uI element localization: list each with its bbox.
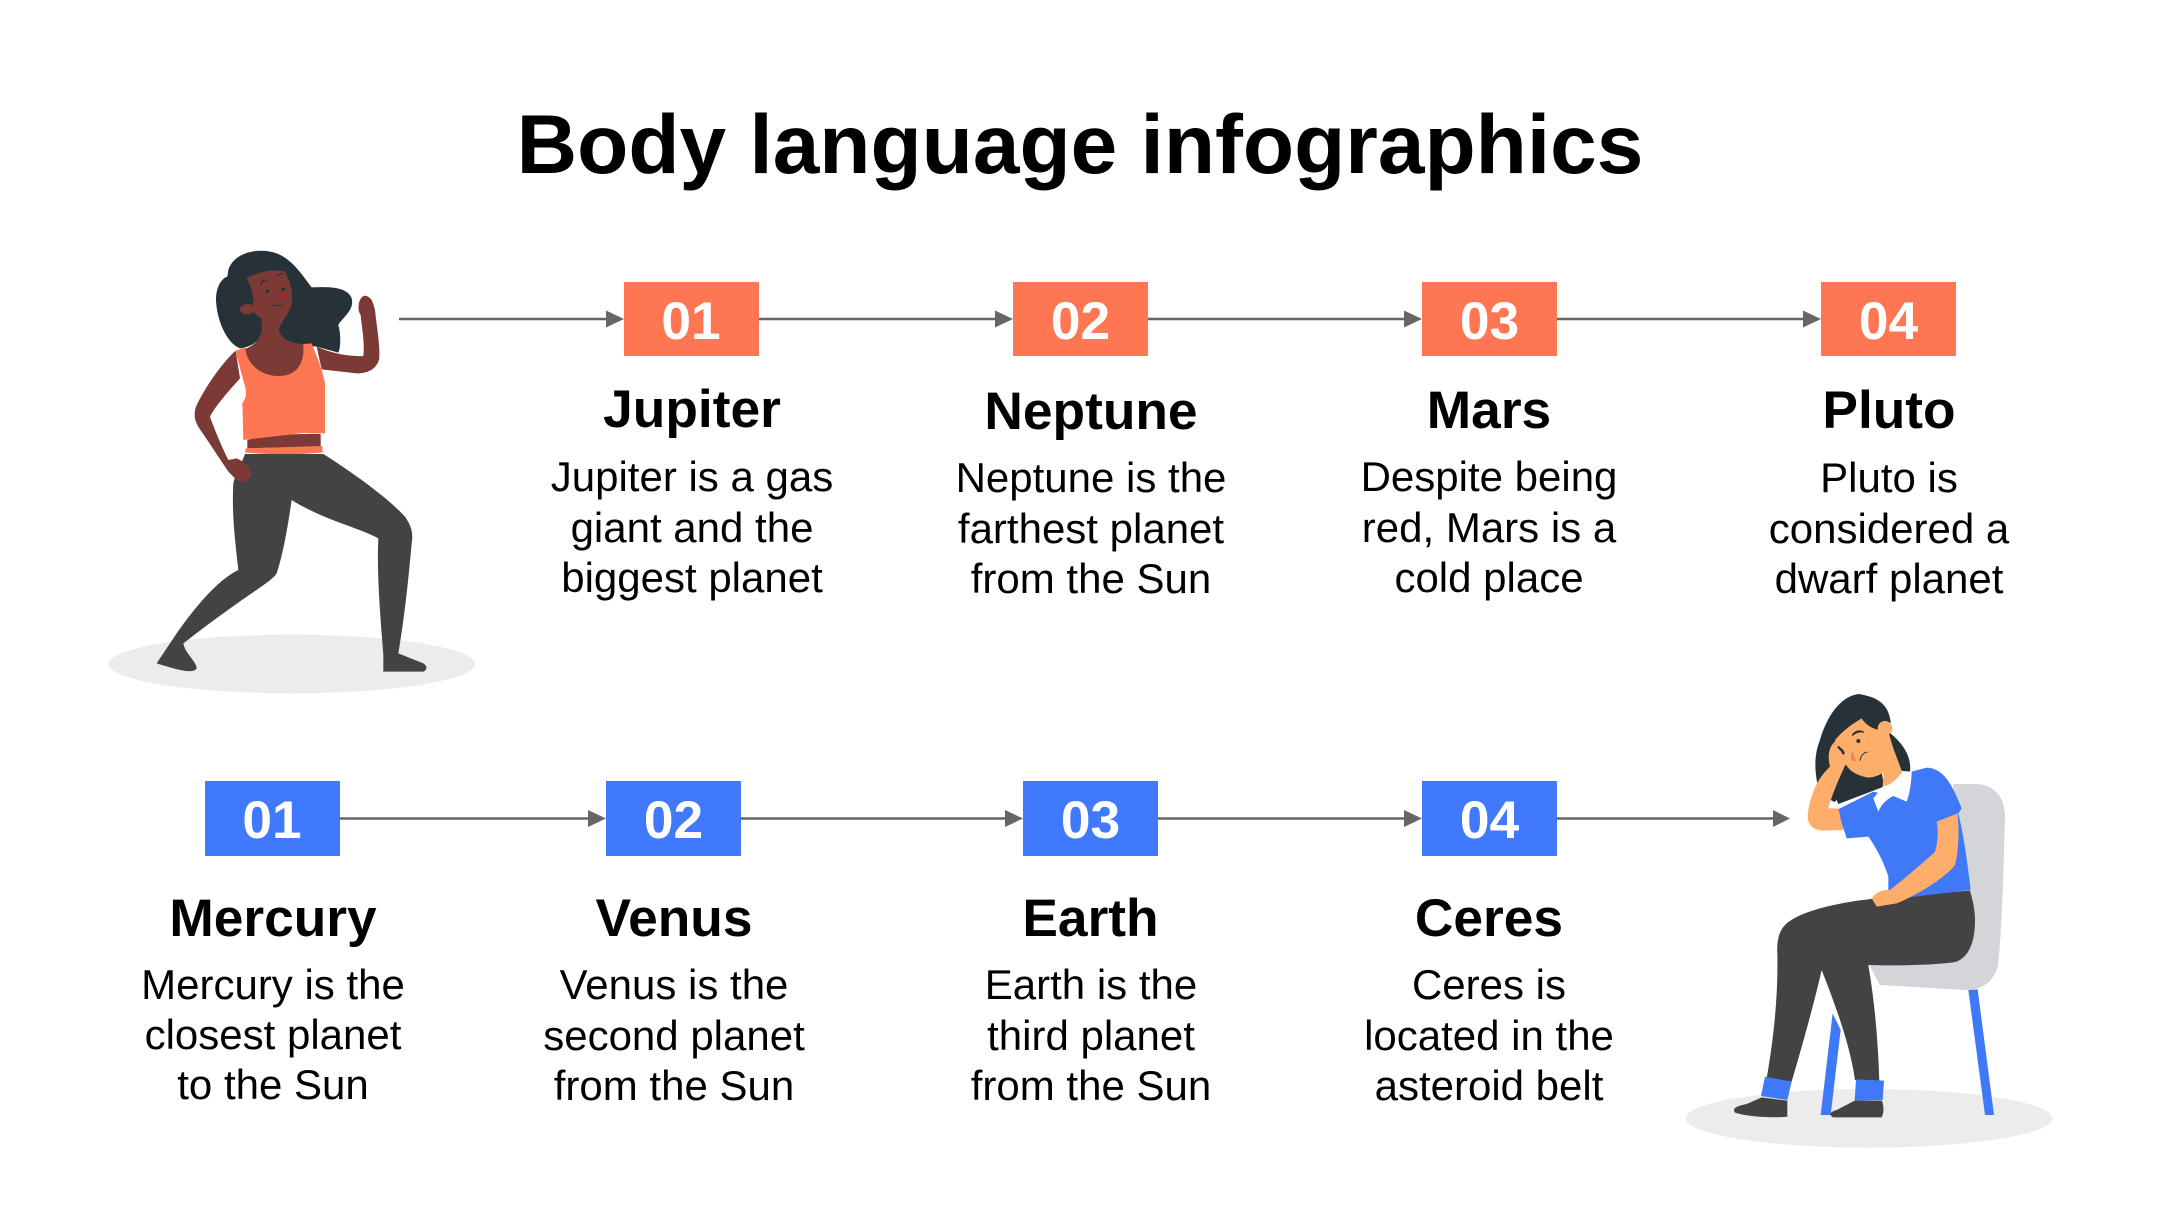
- step: Neptune: Neptune: [984, 382, 1198, 441]
- step: Neptune: from the Sun: [971, 555, 1211, 602]
- step: Earth: Earth is the: [985, 961, 1197, 1008]
- arrow: 01 to 02 blue: [340, 810, 606, 827]
- step: Ceres: Ceres: [1415, 889, 1563, 948]
- arrow: 02 to 03 orange: [1148, 310, 1422, 328]
- step: Earth: Earth: [1022, 889, 1159, 948]
- step: Jupiter: biggest planet: [561, 554, 823, 601]
- step: Mercury: [141, 781, 405, 1108]
- arrow: 04 to figure blue: [1557, 810, 1790, 827]
- step: Pluto: Pluto is: [1820, 454, 1958, 501]
- step: Mercury: closest planet: [145, 1011, 402, 1058]
- step: Mars: cold place: [1394, 554, 1584, 601]
- step: Mars: Despite being: [1361, 453, 1617, 500]
- step: Pluto: Pluto: [1822, 381, 1956, 440]
- step: Ceres: Ceres is: [1412, 961, 1566, 1008]
- step: Venus: second planet: [543, 1012, 805, 1059]
- step: Pluto: 04: [1859, 292, 1918, 351]
- title: Body language infographics: [517, 97, 1643, 191]
- arrow: 01 to 02 orange: [759, 310, 1013, 328]
- step: Venus: from the Sun: [554, 1062, 794, 1109]
- step: Mercury: 01: [242, 791, 302, 850]
- step: Pluto: [1769, 282, 2010, 602]
- step: Mercury: Mercury: [169, 889, 377, 948]
- step: Ceres: [1364, 781, 1614, 1109]
- step: Neptune: 02: [1051, 292, 1110, 351]
- step: Jupiter: Jupiter is a gas: [551, 453, 833, 500]
- figure: tired woman sitting on chair: [1686, 694, 2052, 1148]
- step: Venus: Venus is the: [560, 961, 788, 1008]
- step: Ceres: asteroid belt: [1375, 1062, 1604, 1109]
- arrow: 03 to 04 orange: [1557, 310, 1821, 328]
- step: Venus: 02: [644, 791, 703, 850]
- step: Earth: third planet: [987, 1012, 1195, 1059]
- step: Pluto: considered a: [1769, 505, 2010, 552]
- step: Mars: red, Mars is a: [1362, 504, 1617, 551]
- step: Mars: Mars: [1427, 381, 1551, 440]
- step: Neptune: farthest planet: [958, 505, 1224, 552]
- step: Jupiter: 01: [661, 292, 721, 351]
- step: Mars: 03: [1460, 292, 1519, 351]
- step: Earth: from the Sun: [971, 1062, 1211, 1109]
- step: Neptune: [956, 282, 1226, 602]
- step: Neptune: Neptune is the: [956, 454, 1226, 501]
- step: Jupiter: [551, 282, 833, 601]
- step: Earth: 03: [1061, 791, 1120, 850]
- step: Jupiter: Jupiter: [603, 380, 781, 439]
- arrow: 03 to 04 blue: [1158, 810, 1422, 827]
- step: Earth: [971, 781, 1211, 1109]
- step: Mercury: Mercury is the: [141, 961, 405, 1008]
- step: Venus: Venus: [595, 889, 753, 948]
- arrow: figure to 01 orange: [399, 310, 624, 328]
- step: Ceres: located in the: [1364, 1012, 1614, 1059]
- step: Jupiter: giant and the: [571, 504, 813, 551]
- step: Mars: [1361, 282, 1617, 601]
- step: Ceres: 04: [1460, 791, 1519, 850]
- step: Pluto: dwarf planet: [1775, 555, 2004, 602]
- step: Venus: [543, 781, 805, 1109]
- figure: dancing woman in orange top: [108, 251, 475, 693]
- step: Mercury: to the Sun: [177, 1061, 369, 1108]
- arrow: 02 to 03 blue: [741, 810, 1023, 827]
